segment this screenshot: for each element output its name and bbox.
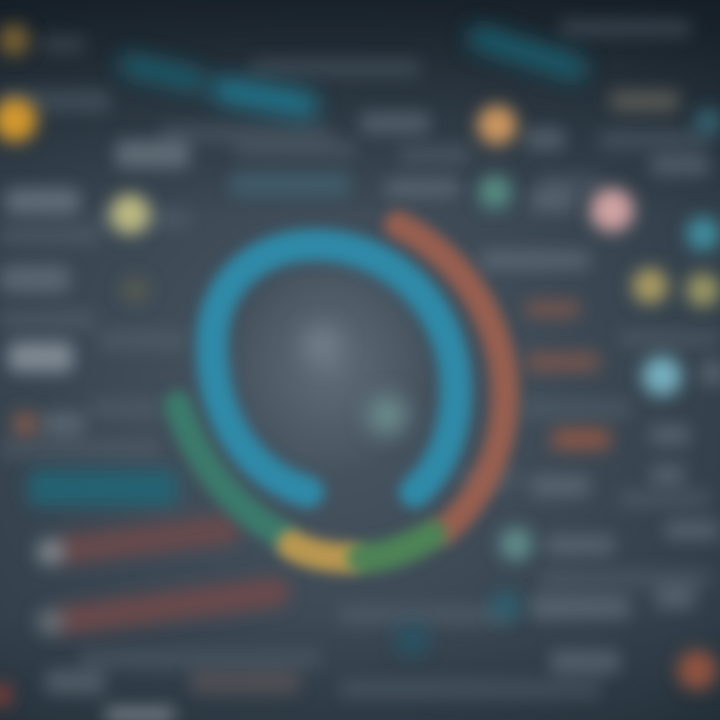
yellow dot two	[686, 273, 720, 307]
pink dot	[590, 188, 634, 232]
teal dot	[478, 175, 512, 209]
outer light green arc	[362, 535, 432, 558]
red bar one	[65, 530, 225, 550]
edge red dot	[0, 683, 12, 707]
left red dot	[12, 411, 38, 437]
teal bar	[28, 470, 178, 506]
left bars	[28, 470, 275, 635]
orange dot left	[0, 98, 37, 142]
centre dots	[302, 325, 407, 435]
navy teal dot	[395, 623, 429, 657]
bar markers	[37, 539, 63, 565]
donut chart	[178, 225, 505, 558]
dim yellow dot	[121, 276, 149, 304]
inner blue ring	[212, 245, 456, 492]
pale teal dot	[499, 527, 533, 561]
faint text rows: centre and right columns	[190, 90, 720, 694]
outer yellow arc	[292, 545, 350, 558]
right blue-gray dot	[694, 108, 720, 136]
blue dot right	[686, 217, 720, 251]
yellow dot one	[632, 268, 668, 304]
red bar two	[65, 592, 275, 620]
dim blue dot	[491, 591, 521, 621]
blue heading bars at top	[130, 38, 575, 105]
pale yellow dot	[110, 194, 150, 234]
centre glow	[230, 255, 430, 475]
muted red-brown labels on the right	[525, 300, 610, 450]
outer green arc	[178, 405, 282, 535]
orange dot top	[477, 105, 517, 145]
faint text rows: left column	[0, 35, 190, 720]
dim orange dot	[0, 24, 30, 56]
light blue dot	[642, 356, 682, 396]
outer orange-red arc	[398, 225, 505, 530]
orange-red dot	[677, 650, 717, 690]
